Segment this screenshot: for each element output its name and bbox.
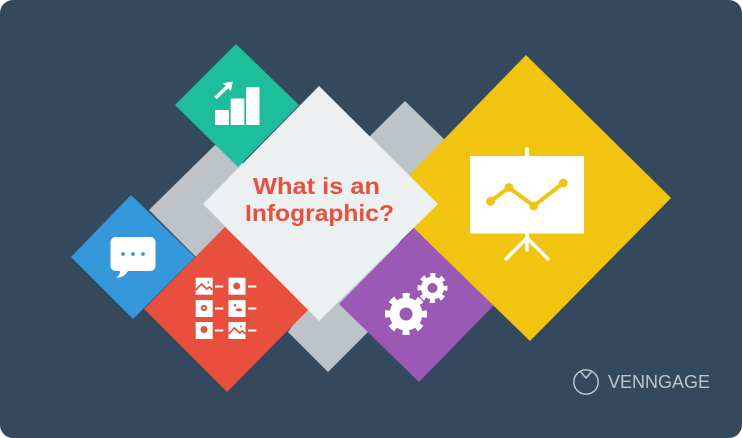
teal diamond with growth chart xyxy=(175,44,299,167)
icon: presentation board xyxy=(470,149,584,259)
icon: speech bubble xyxy=(110,237,156,278)
Venngage logo xyxy=(574,370,710,394)
title: What is an xyxy=(253,173,380,199)
yellow diamond with presentation board xyxy=(385,55,671,341)
logo wordmark: VENNGAGE xyxy=(608,371,710,392)
icon: logo circle xyxy=(574,370,598,394)
blue diamond with speech bubble xyxy=(71,195,195,319)
icon: large gear xyxy=(388,296,424,332)
gray diamond band: left xyxy=(149,145,300,276)
purple diamond with gears xyxy=(339,228,494,382)
icon: bar chart with arrow xyxy=(215,82,260,125)
title: Infographic? xyxy=(245,200,394,226)
center white diamond with title xyxy=(203,86,438,321)
gray diamond band: bottom xyxy=(288,240,400,372)
icon: small gear xyxy=(420,275,446,301)
gray diamond band: upper right xyxy=(360,101,446,190)
red diamond with image list xyxy=(144,227,309,392)
icon: image list grid xyxy=(196,278,256,339)
